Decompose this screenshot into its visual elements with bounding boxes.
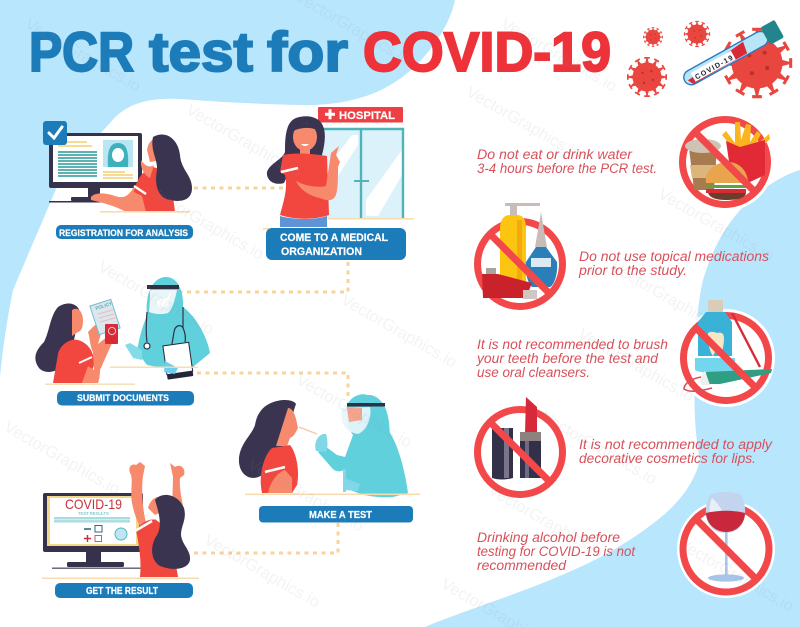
step 2: hospital illustration	[263, 107, 414, 230]
text: no lip cosmetics	[579, 437, 773, 466]
woman at computer	[91, 134, 192, 212]
prohibition icon: topical medications	[474, 203, 566, 310]
table line	[263, 228, 373, 230]
text: no alcohol: recommended	[477, 558, 567, 573]
icon: small viruses	[627, 21, 710, 97]
text: no brushing teeth: use oral cleansers.	[477, 365, 590, 380]
watermark: VectorGraphics.io	[145, 183, 267, 264]
label: registration for analysis: REGISTRATION FOR ANALYSIS	[59, 228, 188, 239]
label: submit documents	[57, 391, 194, 406]
title: test	[149, 20, 253, 83]
watermark: VectorGraphics.io	[498, 15, 620, 96]
title: COVID-19	[363, 20, 611, 83]
step 4: make a test illustration	[239, 394, 420, 497]
woman with documents	[35, 299, 120, 383]
text: no brushing teeth: your teeth before the test and	[476, 351, 658, 366]
label: come to a medical organization: ORGANIZATION	[281, 246, 362, 258]
step 3: submit documents illustration	[35, 277, 210, 385]
watermark: VectorGraphics.io	[95, 258, 217, 339]
icon: large virus with covid test tube: COVID-19	[693, 53, 734, 81]
table lines	[45, 384, 135, 385]
step 1: registration illustration	[43, 121, 192, 213]
watermark: VectorGraphics.io	[538, 408, 660, 489]
prohibition icon: fast food	[676, 113, 774, 211]
text: no alcohol: testing for COVID-19 is not	[477, 544, 636, 559]
swab	[299, 427, 317, 434]
label: get the result: GET THE RESULT	[86, 586, 158, 597]
hospital sign: HOSPITAL	[339, 110, 395, 122]
title	[29, 20, 611, 83]
text: no topical medications: prior to the study.	[578, 263, 687, 278]
prohibition icon: wine glass	[677, 492, 775, 598]
label: make a test: MAKE A TEST	[309, 509, 373, 521]
watermark: VectorGraphics.io	[245, 455, 367, 536]
title: PCR	[29, 20, 134, 83]
text: no eating: 3-4 hours before the PCR test.	[477, 161, 657, 176]
doctor with test tube	[315, 394, 408, 497]
watermark: VectorGraphics.io	[485, 481, 607, 562]
label: come to a medical organization: COME TO A MEDICAL	[280, 232, 388, 244]
text: no alcohol: Drinking alcohol before	[477, 530, 620, 545]
watermark: VectorGraphics.io	[463, 83, 585, 164]
dotted connector: registration to hospital	[194, 186, 285, 190]
text: no lip cosmetics: decorative cosmetics for lips.	[579, 451, 756, 466]
prohibition icon: oral cleansers	[677, 300, 775, 407]
watermark: VectorGraphics.io	[655, 185, 777, 266]
prohibition icon: lipstick	[474, 397, 566, 498]
label: make a test	[259, 506, 413, 522]
woman pointing	[267, 116, 340, 227]
title: for	[267, 20, 348, 83]
label: come to a medical organization	[266, 228, 406, 260]
text: no brushing teeth	[476, 337, 668, 380]
dotted connector: documents to test	[197, 373, 348, 397]
label: get the result	[55, 583, 193, 598]
watermark: VectorGraphics.io	[183, 101, 305, 182]
doctor in protective suit	[125, 277, 210, 380]
watermark: VectorGraphics.io	[608, 258, 730, 339]
dotted connector: hospital to documents	[181, 262, 348, 292]
woman with nose swab	[239, 400, 298, 493]
table line	[42, 578, 199, 579]
text: no eating: Do not eat or drink water	[477, 147, 633, 162]
table line	[245, 494, 420, 495]
watermark: VectorGraphics.io	[1, 418, 123, 499]
text: no topical medications: Do not use topical medications	[579, 249, 769, 264]
watermark: VectorGraphics.io	[22, 15, 144, 96]
text: no alcohol	[477, 530, 636, 573]
watermark: VectorGraphics.io	[575, 325, 697, 406]
icon: large virus with covid test tube	[680, 20, 792, 98]
label: submit documents: SUBMIT DOCUMENTS	[77, 393, 169, 404]
result monitor: COVID-19	[65, 496, 122, 512]
watermark: VectorGraphics.io	[675, 535, 797, 616]
icon: check badge	[43, 121, 67, 145]
result monitor	[43, 493, 143, 569]
cheering woman	[129, 462, 190, 577]
text: no eating	[477, 147, 657, 176]
step 5: get the result illustration	[42, 462, 199, 579]
watermark: VectorGraphics.io	[201, 531, 323, 612]
text: no brushing teeth: It is not recommended to brush	[477, 337, 668, 352]
text: no topical medications	[578, 249, 769, 278]
text: no lip cosmetics: It is not recommended to apply	[579, 437, 773, 452]
hospital sign	[318, 107, 403, 122]
watermark: VectorGraphics.io	[293, 371, 415, 452]
woman with documents: POLICY	[95, 301, 113, 311]
hospital door	[320, 128, 414, 220]
table line	[100, 211, 190, 213]
dotted connector: test to result	[190, 523, 338, 553]
monitor	[49, 133, 142, 202]
result monitor: TEST RESULTS	[78, 511, 109, 516]
watermark: VectorGraphics.io	[338, 291, 460, 372]
